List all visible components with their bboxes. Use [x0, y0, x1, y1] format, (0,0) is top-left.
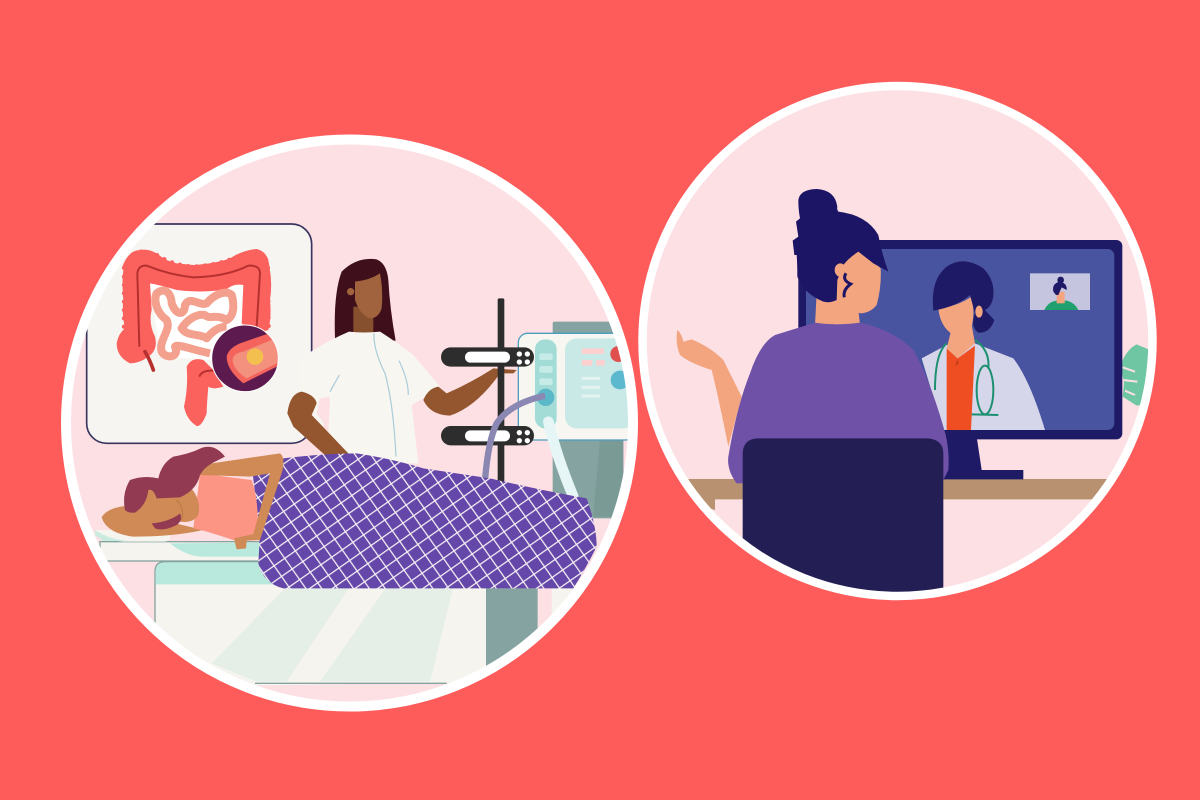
nurse right arm — [423, 368, 517, 416]
illustration canvas — [61, 82, 1157, 712]
chair — [743, 438, 943, 593]
nurse left arm — [287, 392, 348, 457]
purple tube — [485, 396, 545, 480]
leaf — [1122, 344, 1150, 406]
iv pole — [441, 298, 534, 485]
magnified polyp lens — [212, 325, 283, 392]
nurse face — [347, 273, 382, 318]
woman arm and hand — [677, 330, 742, 447]
monitor — [798, 240, 1122, 479]
woman head — [793, 189, 888, 325]
nurse coat — [300, 332, 440, 463]
desk — [680, 479, 1108, 510]
doctor on screen — [922, 261, 1045, 430]
woman sweater — [728, 323, 949, 483]
nurse, iv pole and machine — [287, 259, 635, 518]
bed and patient — [95, 447, 623, 687]
ring: right circle border — [642, 86, 1152, 596]
panel: telehealth scene — [642, 86, 1152, 596]
patient blanket — [253, 453, 597, 588]
machine — [518, 322, 635, 518]
nurse hair — [335, 259, 396, 341]
patient hair — [124, 447, 225, 513]
bed — [95, 530, 623, 687]
poster: digestive system anatomy — [87, 224, 312, 443]
video inset — [1030, 273, 1090, 310]
ring: left circle border — [66, 140, 633, 706]
patient body — [102, 453, 283, 549]
panel: hospital procedure scene — [66, 140, 635, 706]
